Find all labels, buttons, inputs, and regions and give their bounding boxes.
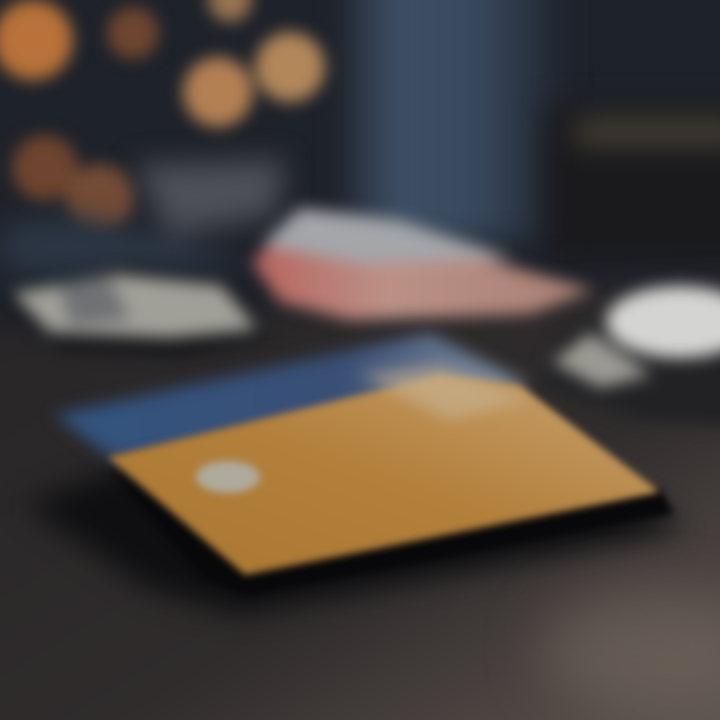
background: dark object upper right [545,105,720,260]
background: blue vertical panel [345,0,560,240]
main card: blue section [55,333,530,460]
main card: faint highlight [360,365,530,420]
bokeh orange lights [0,0,325,232]
white round object right [540,285,720,430]
table surface [0,280,720,720]
white-grey card stack left [0,268,268,356]
table highlight bottom right [540,590,720,710]
main card shadow [25,470,680,615]
main card: orange section [108,375,660,575]
main card: chip [196,461,260,493]
pink card [252,208,594,320]
main card: black edge [105,465,674,596]
blurred grey object behind cards [0,160,285,275]
